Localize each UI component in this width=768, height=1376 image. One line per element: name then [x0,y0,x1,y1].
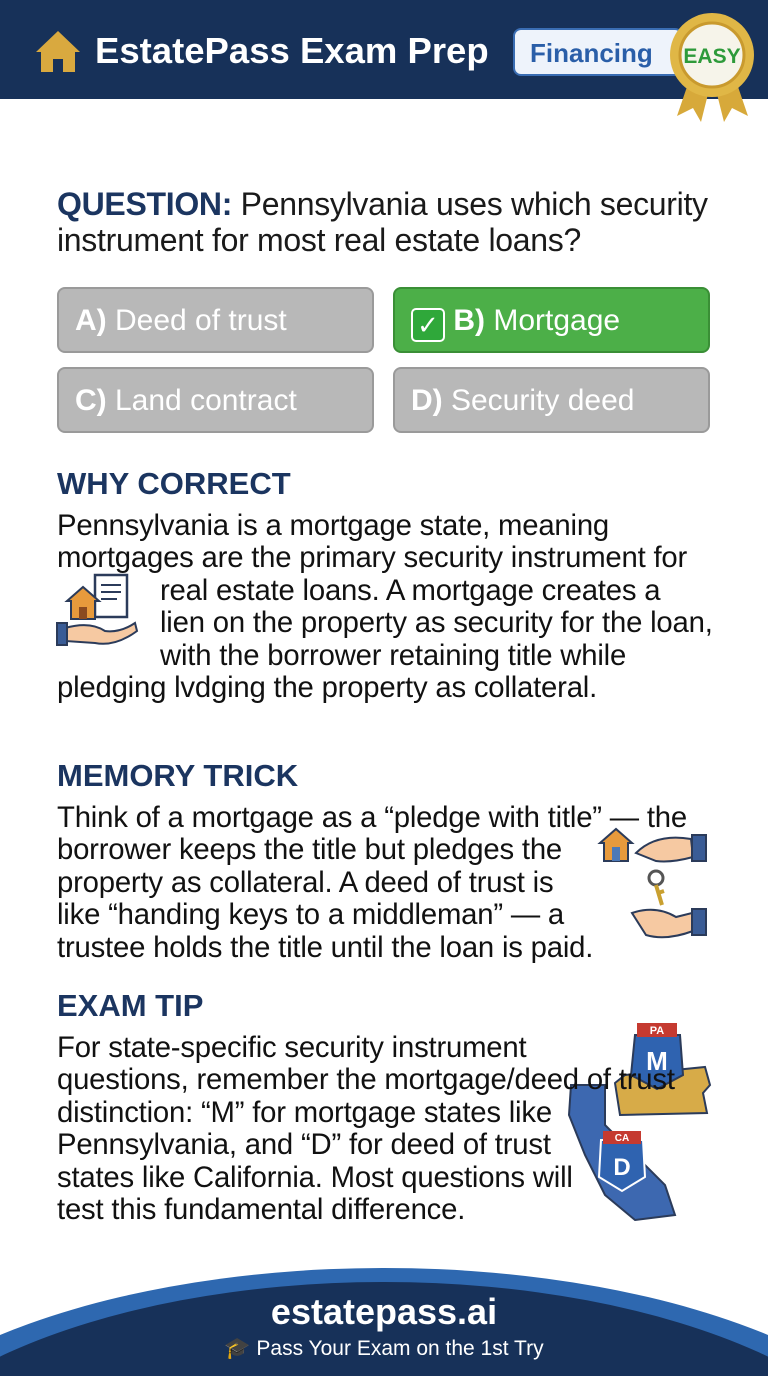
icon: hand with house and document [56,574,138,646]
text: why correct: Pennsylvania is a mortgage state, meaning [57,509,609,542]
text: exam tip [57,1031,675,1226]
text: memory trick: Think of a mortgage as a “pledge with title” — the [57,801,687,834]
heading: why correct: WHY CORRECT [57,466,291,501]
difficulty ribbon: EASY [683,45,741,68]
text: why correct: real estate loans. A mortgage creates a [160,574,660,607]
answer A: A) Deed of trust [75,304,287,337]
text: memory trick: like “handing keys to a middleman” — a [57,898,564,931]
answer C [57,367,374,433]
text: exam tip: Pennsylvania, and “D” for deed of trust [57,1128,551,1161]
text: exam tip: questions, remember the mortgage/deed of trust [57,1063,675,1096]
category badge: Financing [530,38,653,68]
answer C: C) Land contract [75,384,297,417]
header bar [0,0,768,99]
difficulty ribbon [670,13,754,122]
text: why correct: pledging lvdging the property as collateral. [57,671,597,704]
text: exam tip: distinction: “M” for mortgage states like [57,1096,552,1129]
text: memory trick: property as collateral. A deed of trust is [57,866,553,899]
category badge [513,28,683,76]
text: exam tip: states like California. Most questions will [57,1161,573,1194]
map icon: PA and CA [568,1023,712,1221]
text: exam tip: For state-specific security instrument [57,1031,526,1064]
text: memory trick: trustee holds the title until the loan is paid. [57,931,593,964]
answer D: D) Security deed [411,384,634,417]
text: exam tip: test this fundamental difference. [57,1193,465,1226]
answer B correct: ✓ [417,310,439,340]
text: memory trick [57,801,687,964]
answer A [57,287,374,353]
footer arc [0,1268,768,1376]
answer B correct [393,287,710,353]
icon: house [36,31,80,72]
title: EstatePass Exam Prep [95,30,489,71]
text: why correct [57,509,713,704]
heading: exam tip: EXAM TIP [57,988,203,1023]
text: why correct: lien on the property as security for the loan, [160,606,713,639]
map icon: PA and CA: M [646,1046,668,1076]
icon: handing keys [597,828,707,938]
question: QUESTION: Pennsylvania uses which security instrument for most real estate loans? [57,186,708,258]
text: memory trick: borrower keeps the title but pledges the [57,833,562,866]
map icon: PA and CA: D [613,1154,631,1181]
answer B correct: B) Mortgage [453,304,620,337]
footer tagline: 🎓 Pass Your Exam on the 1st Try [224,1337,544,1360]
text: why correct: mortgages are the primary security instrument for [57,541,687,574]
answer D [393,367,710,433]
map icon: PA and CA: PA [650,1025,664,1037]
map icon: PA and CA: CA [615,1133,629,1144]
footer brand: estatepass.ai [271,1291,497,1332]
heading: memory trick: MEMORY TRICK [57,758,298,793]
text: why correct: with the borrower retaining title while [160,639,626,672]
